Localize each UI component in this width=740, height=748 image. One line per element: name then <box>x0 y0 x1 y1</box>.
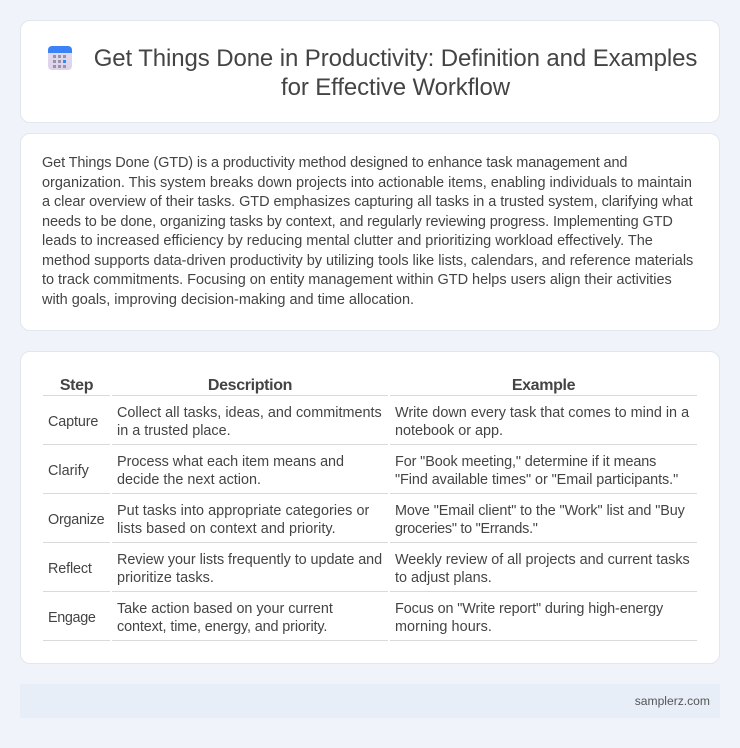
text block: summary: with goals, improving decision-making and time allocation. <box>42 292 414 308</box>
row: Clarify: "Find available times" or "Email participants." <box>395 472 678 488</box>
row: Organize: lists based on context and priority. <box>117 521 336 537</box>
row: Clarify <box>43 454 697 494</box>
text block: summary: Get Things Done (GTD) is a productivity method designed to enhance task management and <box>42 155 627 171</box>
row: Organize: Put tasks into appropriate categories or <box>117 503 369 519</box>
row: Reflect: prioritize tasks. <box>117 570 214 586</box>
row: Reflect: to adjust plans. <box>395 570 492 586</box>
row: Engage <box>43 601 697 641</box>
row: Capture: Write down every task that comes to mind in a <box>395 405 689 421</box>
row: Clarify: decide the next action. <box>117 472 261 488</box>
panel: title card <box>20 20 720 123</box>
row: Capture <box>43 405 697 445</box>
text block: summary: leads to increased efficiency by reducing mental clutter and prioritizing workload effectively. The <box>42 233 653 249</box>
row: Organize: Move "Email client" to the "Work" list and "Buy <box>395 503 685 519</box>
title <box>94 45 697 101</box>
icon: calendar <box>48 46 72 70</box>
table header: Example <box>512 377 575 394</box>
row: Organize: Organize <box>48 512 104 528</box>
text block: summary: needs to be done, organizing tasks by context, and regularly reviewing progress. Implementing GTD <box>42 214 673 230</box>
row: Engage: Focus on "Write report" during high-energy <box>395 601 663 617</box>
panel: summary paragraph <box>20 133 720 331</box>
table header: Description <box>208 377 292 394</box>
text block: summary: method supports data-driven productivity by utilizing tools like lists, calendars, and reference materials <box>42 252 693 268</box>
row: Capture: Collect all tasks, ideas, and commitments <box>117 405 382 421</box>
text block: summary: to track commitments. Focusing on entity management within GTD helps users align their activities <box>42 272 672 288</box>
row: Engage: Take action based on your current <box>117 601 333 617</box>
table header: Step <box>60 377 93 394</box>
row: Reflect <box>43 552 697 592</box>
row: Clarify: Clarify <box>48 463 89 479</box>
table header <box>43 377 697 396</box>
row: Reflect: Reflect <box>48 561 92 577</box>
row: Clarify: For "Book meeting," determine if it means <box>395 454 656 470</box>
row: Reflect: Weekly review of all projects and current tasks <box>395 552 690 568</box>
footer bar <box>20 684 720 718</box>
footer source text: samplerz.com <box>635 694 710 708</box>
text block: summary: organization. This system breaks down projects into actionable items, enabling individuals to maintain <box>42 174 692 190</box>
row: Capture: in a trusted place. <box>117 423 231 439</box>
row: Organize: groceries" to "Errands." <box>395 521 538 537</box>
text block: summary <box>42 155 693 308</box>
panel: steps table <box>20 351 720 664</box>
row: Reflect: Review your lists frequently to update and <box>117 552 382 568</box>
text block: summary: a clear overview of their tasks. GTD emphasizes capturing all tasks in a trusted system, clarifying what <box>42 194 693 210</box>
row: Engage: Engage <box>48 610 96 626</box>
row: Engage: context, time, energy, and priority. <box>117 619 327 635</box>
title: for Effective Workflow <box>281 74 510 101</box>
row: Clarify: Process what each item means and <box>117 454 344 470</box>
row: Capture: notebook or app. <box>395 423 503 439</box>
row: Organize <box>43 503 697 543</box>
row: Engage: morning hours. <box>395 619 492 635</box>
title: Get Things Done in Productivity: Definition and Examples <box>94 45 697 72</box>
row: Capture: Capture <box>48 414 98 430</box>
